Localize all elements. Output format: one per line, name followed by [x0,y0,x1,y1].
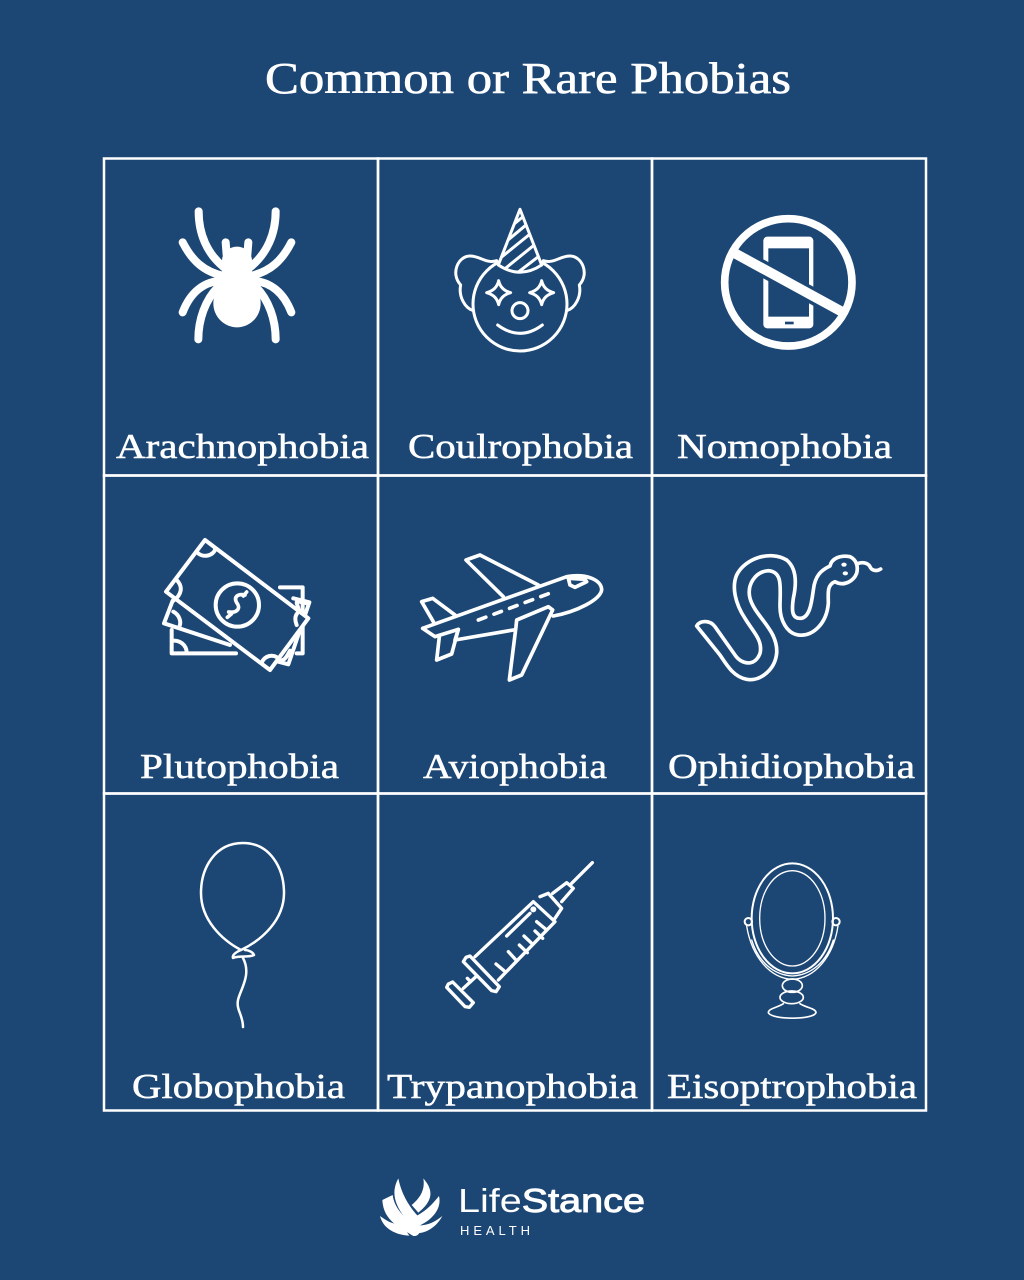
panel: Globophobia [104,794,378,1110]
icon: money [164,540,309,670]
icon: syringe [447,863,592,1007]
panel: phobia grid [104,158,926,1110]
panel: Eisoptrophobia [652,794,926,1110]
panel: Aviophobia [378,476,652,794]
icon: mirror [745,863,840,1018]
label: Eisoptrophobia: Eisoptrophobia [667,1067,918,1106]
logo: LifeStance Health [380,1178,645,1238]
panel: Ophidiophobia [652,476,926,794]
icon: clown [456,209,584,351]
icon: snake [697,556,881,680]
icon: balloon [201,843,284,1027]
icon: crossed-out phone [725,219,852,346]
label: Plutophobia: Plutophobia [140,747,340,786]
label: Aviophobia: Aviophobia [423,747,608,786]
icon: airplane [422,555,602,680]
label: Coulrophobia: Coulrophobia [408,427,634,466]
panel: Plutophobia [104,476,378,794]
logo wordmark: Life Stance [458,1182,645,1219]
panel: Arachnophobia [104,158,378,476]
panel: Trypanophobia [378,794,652,1110]
label: Nomophobia: Nomophobia [677,427,893,466]
title: Common or Rare Phobias [265,54,791,103]
icon: logo emblem [380,1178,442,1236]
label: Ophidiophobia: Ophidiophobia [668,747,916,786]
icon: spider [183,211,291,339]
label: Trypanophobia: Trypanophobia [387,1067,639,1106]
label: Arachnophobia: Arachnophobia [116,427,370,466]
label: Globophobia: Globophobia [132,1067,346,1106]
panel: Nomophobia [652,158,926,476]
panel: Coulrophobia [378,158,652,476]
logo subtitle: HEALTH [460,1223,530,1238]
